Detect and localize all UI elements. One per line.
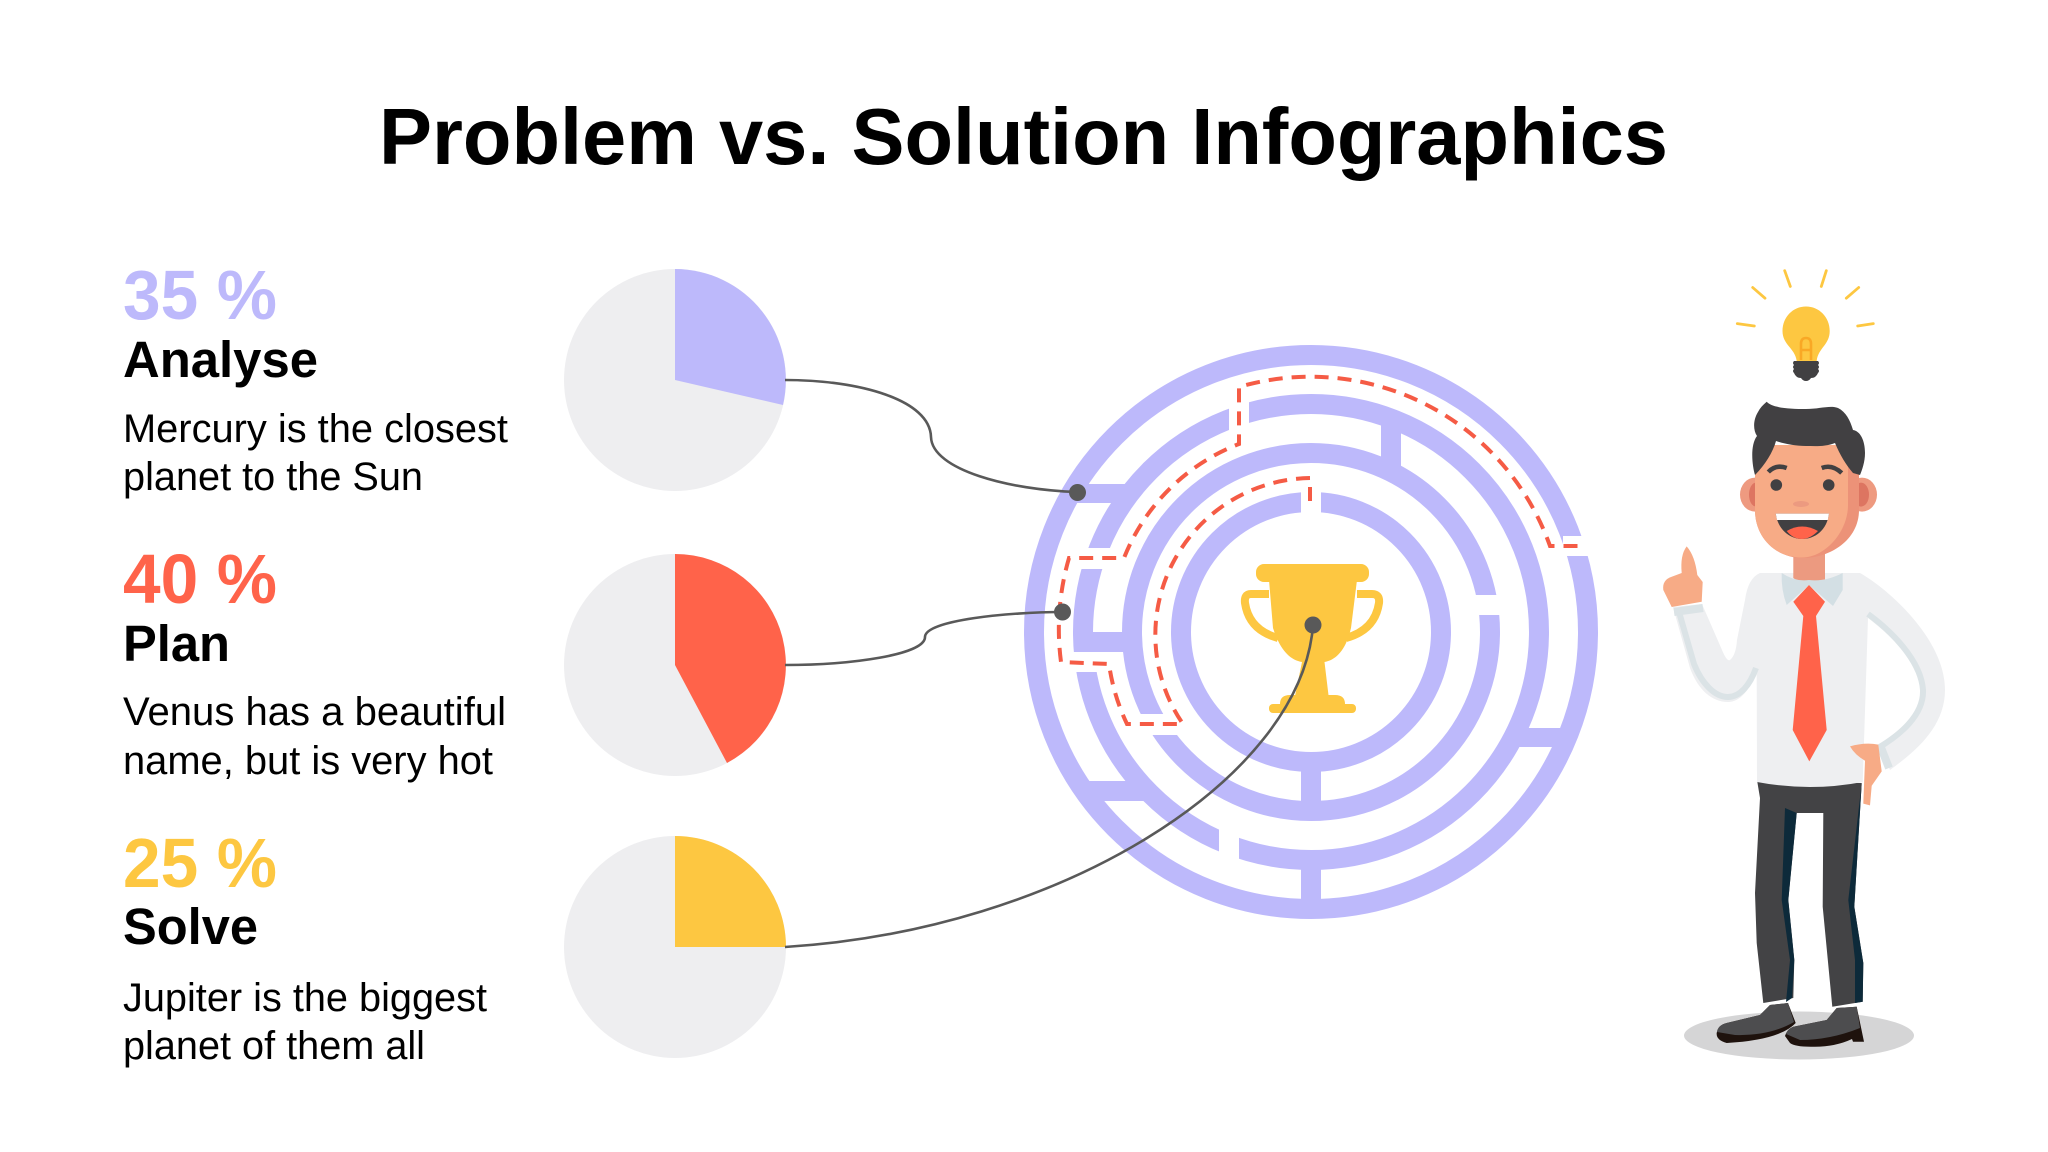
text block: Solve [123, 824, 487, 1068]
maze connecting walls [1069, 415, 1564, 902]
nose [1793, 501, 1809, 507]
collar [1782, 573, 1843, 606]
icon: light bulb [1737, 271, 1873, 381]
title: Problem vs. Solution Infographics [379, 92, 1668, 181]
pie chart: Solve [564, 836, 786, 1058]
left hand pointing [1663, 546, 1703, 607]
eyebrows and eyes [1768, 467, 1842, 491]
description: Analyse [123, 407, 508, 499]
shirt shading [1674, 608, 1923, 768]
connector: Solve pie to trophy [785, 616, 1322, 947]
mouth [1776, 514, 1829, 539]
trousers [1755, 782, 1863, 1007]
description: Analyse: planet to the Sun [123, 455, 423, 499]
ears [1740, 478, 1877, 512]
percentage: 40 %: 40 % [123, 540, 277, 618]
description: Solve [123, 976, 487, 1068]
heading: Solve: Solve [123, 898, 258, 955]
bulb rays [1737, 271, 1873, 326]
right shoe [1785, 1007, 1864, 1047]
icon: trophy [1245, 564, 1379, 713]
description: Solve: Jupiter is the biggest [123, 976, 487, 1020]
maze rings [1034, 355, 1588, 909]
description: Plan: Venus has a beautiful [123, 690, 506, 734]
percentage: 25 %: 25 % [123, 824, 277, 902]
bulb glass [1782, 306, 1830, 361]
illustration: businessman [1663, 402, 1945, 1060]
percentage: 35 %: 35 % [123, 256, 277, 334]
pie chart: Plan [564, 554, 786, 776]
pie chart: Analyse [564, 269, 786, 491]
face highlight [1755, 445, 1848, 558]
neck [1793, 550, 1825, 585]
shirt [1673, 573, 1945, 787]
description: Solve: planet of them all [123, 1024, 425, 1068]
bulb filament [1801, 338, 1811, 360]
face [1755, 445, 1859, 558]
hair [1752, 402, 1865, 475]
dashed solution path [1059, 377, 1578, 724]
text block: Plan [123, 540, 506, 783]
connector: Plan pie to maze [785, 604, 1071, 665]
right hand on hip [1850, 744, 1882, 805]
tie [1793, 585, 1827, 761]
maze [1034, 355, 1603, 909]
ground shadow [1684, 1012, 1914, 1060]
left shoe [1717, 1003, 1796, 1043]
description: Plan: name, but is very hot [123, 739, 493, 783]
description: Plan [123, 690, 506, 783]
heading: Plan: Plan [123, 615, 230, 672]
trouser shading [1782, 783, 1863, 1003]
heading: Analyse: Analyse [123, 331, 318, 388]
connector: Analyse pie to maze [785, 380, 1086, 501]
text block: Analyse [123, 256, 508, 499]
bulb socket [1793, 361, 1819, 381]
description: Analyse: Mercury is the closest [123, 407, 508, 451]
maze openings [1066, 392, 1603, 870]
